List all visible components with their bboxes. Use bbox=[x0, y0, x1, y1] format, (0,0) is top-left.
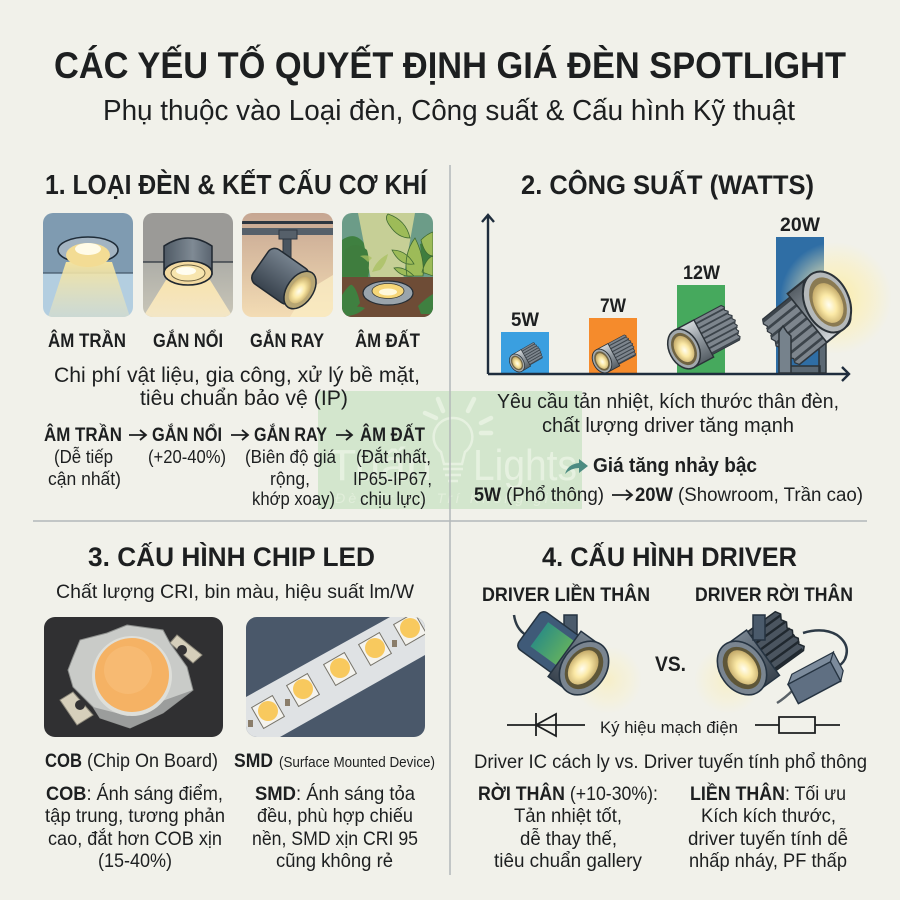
COB text: cao, đắt hơn COB xịn bbox=[48, 827, 222, 850]
driver comparison: Driver IC cách ly vs. Driver tuyến tính phổ thông bbox=[474, 752, 867, 773]
lamp type labels: ÂM ĐẤT bbox=[355, 330, 420, 352]
price flow: GẮN RAY bbox=[254, 424, 327, 446]
bar 12W bbox=[677, 263, 725, 374]
watermark: Đèn Trang Trí Không gian bbox=[335, 490, 570, 506]
subtitle: Phụ thuộc vào Loại đèn, Công suất & Cấu hình Kỹ thuật bbox=[103, 95, 795, 127]
bar 5W bbox=[501, 310, 549, 374]
integrated driver text: driver tuyến tính dễ bbox=[688, 827, 848, 850]
wattage range: 5W bbox=[474, 485, 501, 506]
chip names: SMD bbox=[234, 751, 273, 772]
price flow: (Biên độ giá bbox=[245, 447, 337, 467]
SMD text: cũng không rẻ bbox=[276, 850, 393, 872]
lamp type labels: GẮN NỔI bbox=[153, 330, 223, 352]
chip description: Chất lượng CRI, bin màu, hiệu suất lm/W bbox=[56, 582, 414, 603]
cost description: tiêu chuẩn bảo vệ (IP) bbox=[140, 387, 348, 410]
symbol: resistor bbox=[755, 717, 840, 733]
COB text: (15-40%) bbox=[98, 850, 172, 872]
illustration: surface mounted lamp bbox=[143, 213, 233, 317]
COB text: tập trung, tương phản bbox=[45, 805, 225, 827]
heading 3: 3. CẤU HÌNH CHIP LED bbox=[88, 541, 375, 572]
illustration: in-ground lamp bbox=[342, 213, 433, 317]
cost description: Chi phí vật liệu, gia công, xử lý bề mặt, bbox=[54, 364, 420, 387]
icon: rising arrow bbox=[565, 459, 588, 474]
bar 7W bbox=[589, 296, 637, 374]
bar 5W: 5W bbox=[511, 310, 539, 331]
chip names: (Chip On Board) bbox=[87, 751, 218, 772]
photo: SMD strip bbox=[246, 613, 426, 737]
driver names: DRIVER RỜI THÂN bbox=[695, 584, 853, 606]
separate driver text bbox=[478, 781, 658, 872]
price flow bbox=[44, 424, 432, 509]
price flow: rộng, bbox=[270, 469, 310, 489]
watermark bbox=[318, 391, 582, 509]
SMD text: đều, phù hợp chiếu bbox=[257, 805, 413, 827]
lamp type labels: GẮN RAY bbox=[250, 330, 324, 352]
bar 12W: 12W bbox=[683, 263, 720, 284]
wattage range: (Phổ thông) bbox=[506, 485, 604, 506]
price flow: (Đắt nhất, bbox=[356, 446, 431, 467]
wattage range: (Showroom, Trần cao) bbox=[678, 485, 863, 506]
price flow: ÂM ĐẤT bbox=[360, 424, 425, 446]
chip names: (Surface Mounted Device) bbox=[279, 754, 435, 771]
price flow: (Dễ tiếp bbox=[54, 446, 113, 467]
panel: 2 wattage bbox=[474, 169, 892, 506]
price jump text: Giá tăng nhảy bậc bbox=[593, 455, 757, 477]
circuit symbols bbox=[507, 713, 840, 737]
SMD text: nền, SMD xịn CRI 95 bbox=[252, 828, 418, 850]
requirement text: chất lượng driver tăng mạnh bbox=[542, 415, 794, 437]
price flow: GẮN NỔI bbox=[152, 424, 222, 446]
illustration: recessed lamp bbox=[43, 213, 133, 317]
chart axes bbox=[482, 215, 849, 381]
lamp 7W bbox=[588, 333, 639, 376]
separate driver text: dễ thay thế, bbox=[520, 827, 617, 850]
illustration: separate driver lamp bbox=[694, 608, 847, 714]
heading 2: 2. CÔNG SUẤT (WATTS) bbox=[521, 169, 814, 200]
title: CÁC YẾU TỐ QUYẾT ĐỊNH GIÁ ĐÈN SPOTLIGHT bbox=[54, 44, 846, 86]
lamp type labels bbox=[48, 330, 420, 352]
integrated driver text: nhấp nháy, PF thấp bbox=[689, 850, 847, 872]
price flow: cận nhất) bbox=[48, 469, 121, 489]
wattage range: 20W bbox=[635, 485, 673, 506]
watermark: Tuấn bbox=[328, 441, 432, 490]
price flow: (+20-40%) bbox=[148, 447, 226, 467]
chip names: COB bbox=[45, 751, 82, 772]
separate driver text: tiêu chuẩn gallery bbox=[494, 850, 642, 872]
price flow: khớp xoay) bbox=[252, 489, 335, 509]
lamp 12W bbox=[661, 303, 746, 374]
symbol: diode bbox=[507, 713, 585, 736]
separate driver text: RỜI THÂN (+10-30%): bbox=[478, 781, 658, 805]
requirement text bbox=[497, 391, 839, 437]
SMD text: SMD: Ánh sáng tỏa bbox=[255, 782, 415, 805]
photo: COB chip bbox=[44, 617, 223, 737]
chip names bbox=[45, 751, 435, 772]
price flow: chịu lực) bbox=[360, 489, 426, 509]
circuit symbols: Ký hiệu mạch điện bbox=[600, 718, 738, 737]
illustration: integrated driver lamp bbox=[512, 605, 642, 714]
panel: 1 lamp type and mechanics bbox=[43, 169, 433, 509]
panel: 4 driver bbox=[474, 541, 867, 872]
lamp type labels: ÂM TRẦN bbox=[48, 330, 126, 352]
wattage range bbox=[474, 485, 863, 506]
requirement text: Yêu cầu tản nhiệt, kích thước thân đèn, bbox=[497, 391, 839, 413]
SMD text bbox=[252, 782, 418, 872]
driver names bbox=[482, 584, 853, 606]
heading 4: 4. CẤU HÌNH DRIVER bbox=[542, 541, 797, 572]
bar 20W: 20W bbox=[780, 215, 820, 236]
integrated driver text bbox=[688, 781, 848, 872]
COB text bbox=[45, 782, 225, 872]
lamp 20W bbox=[755, 264, 860, 373]
heading 1: 1. LOẠI ĐÈN & KẾT CẤU CƠ KHÍ bbox=[45, 169, 428, 200]
lamp glow 20W bbox=[780, 242, 892, 354]
integrated driver text: Kích kích thước, bbox=[701, 805, 836, 827]
price flow: ÂM TRẦN bbox=[44, 424, 122, 446]
driver names: DRIVER LIỀN THÂN bbox=[482, 584, 650, 606]
bar chart bbox=[482, 215, 892, 381]
separate driver text: Tản nhiệt tốt, bbox=[514, 805, 622, 827]
bar 7W: 7W bbox=[600, 296, 626, 317]
price flow: IP65-IP67, bbox=[353, 469, 432, 489]
panel: 3 LED chip bbox=[44, 541, 435, 872]
integrated driver text: LIỀN THÂN: Tối ưu bbox=[690, 781, 846, 805]
illustration: track lamp bbox=[242, 213, 333, 317]
VS label: VS. bbox=[655, 653, 686, 676]
watermark: Lights bbox=[473, 441, 577, 490]
lamp 5W bbox=[506, 341, 545, 375]
cost description bbox=[54, 364, 420, 410]
bar 20W bbox=[776, 215, 824, 374]
COB text: COB: Ánh sáng điểm, bbox=[46, 782, 223, 805]
dividers bbox=[33, 165, 867, 875]
